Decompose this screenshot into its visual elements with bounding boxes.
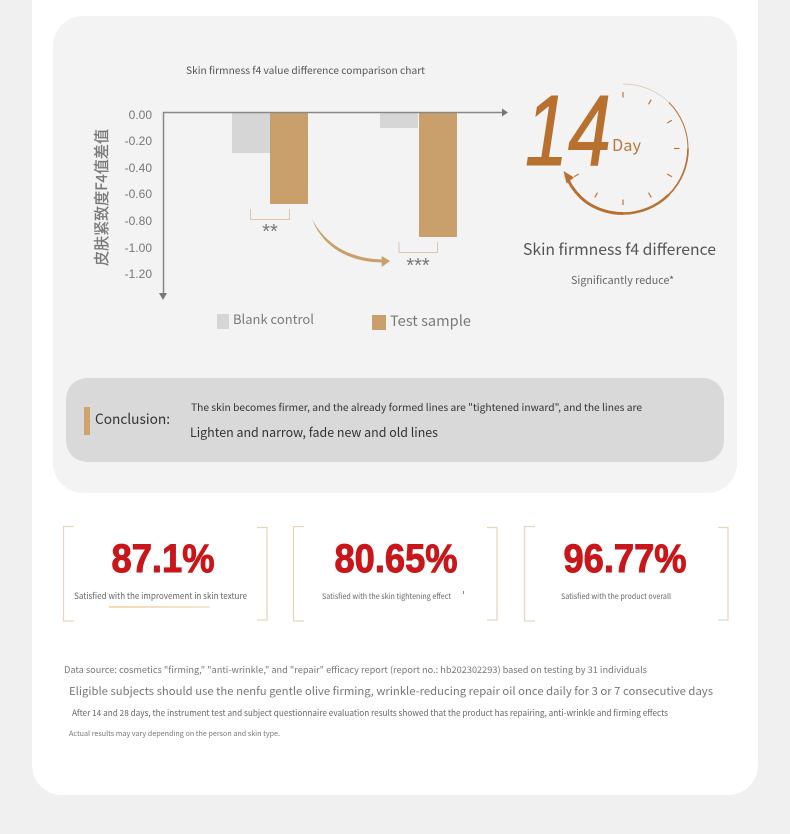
bar chart xyxy=(90,108,508,300)
significance bracket 1: ** xyxy=(262,221,278,243)
clock graphic with 14 Day xyxy=(525,75,688,214)
axes xyxy=(159,108,508,300)
conclusion text: The skin becomes firmer, and the already formed lines are "tightened inward", and the lines are xyxy=(191,399,642,414)
significance bracket 2: *** xyxy=(406,255,430,277)
legend xyxy=(217,309,471,331)
number 14: 14 xyxy=(525,75,611,187)
clock arrowhead xyxy=(564,171,574,184)
legend: Blank control xyxy=(233,309,314,328)
bars: group 1 xyxy=(232,112,308,204)
y axis labels xyxy=(125,108,152,281)
stat: overall: Satisfied with the product overall xyxy=(561,591,671,602)
stat: overall: 96.77% xyxy=(564,537,686,581)
footnotes: Eligible subjects should use the nenfu gentle olive firming, wrinkle-reducing repair oil once daily for 3 or 7 consecutive days xyxy=(69,683,713,699)
bars: group 2 xyxy=(380,112,457,237)
day label: Day xyxy=(612,132,642,156)
panel: chart and result xyxy=(53,16,737,493)
conclusion accent bar xyxy=(84,407,90,435)
footnotes: After 14 and 28 days, the instrument test and subject questionnaire evaluation results showed that the product has repairing, anti-wrinkle and firming effects xyxy=(72,707,668,719)
stat: skin texture: Satisfied with the improvement in skin texture xyxy=(74,590,247,602)
y axis labels: -0.20 xyxy=(125,134,152,148)
stat: overall xyxy=(524,526,728,621)
footnotes: Actual results may vary depending on the person and skin type. xyxy=(69,729,280,739)
y axis labels: 0.00 xyxy=(129,108,152,122)
footnotes: Data source: cosmetics "firming," "anti-wrinkle," and "repair" efficacy report (report no.: hb202302293) based on testing by 31 individuals xyxy=(64,663,647,676)
stat: tightening: Satisfied with the skin tightening effect xyxy=(322,591,451,602)
chart title: Skin firmness f4 value difference comparison chart xyxy=(186,62,425,77)
legend: Test sample xyxy=(390,310,471,331)
conclusion text: Lighten and narrow, fade new and old lines xyxy=(190,422,438,441)
stat: tightening: 80.65% xyxy=(334,537,458,581)
panel: conclusion xyxy=(66,378,724,462)
significance bracket 1 xyxy=(250,209,290,243)
curved arrow xyxy=(312,219,390,267)
y axis labels: -0.80 xyxy=(125,214,152,228)
stat: skin texture: 87.1% xyxy=(112,537,214,581)
y axis labels: -1.00 xyxy=(125,241,152,255)
result heading: Skin firmness f4 difference xyxy=(523,236,716,260)
y axis labels: -0.60 xyxy=(125,187,152,201)
clock arc xyxy=(568,84,688,214)
y axis labels: -1.20 xyxy=(125,267,152,281)
y axis labels: -0.40 xyxy=(125,161,152,175)
footnotes xyxy=(64,663,713,739)
y axis title: 皮肤紧致度F4值差值 xyxy=(90,129,112,266)
conclusion text xyxy=(190,399,642,441)
result subheading: Significantly reduce* xyxy=(571,273,674,288)
stat: tightening xyxy=(294,526,497,621)
clock ticks xyxy=(574,92,680,205)
conclusion label: Conclusion: xyxy=(95,409,170,429)
significance bracket 2 xyxy=(399,242,438,277)
stat: skin texture xyxy=(64,526,267,621)
